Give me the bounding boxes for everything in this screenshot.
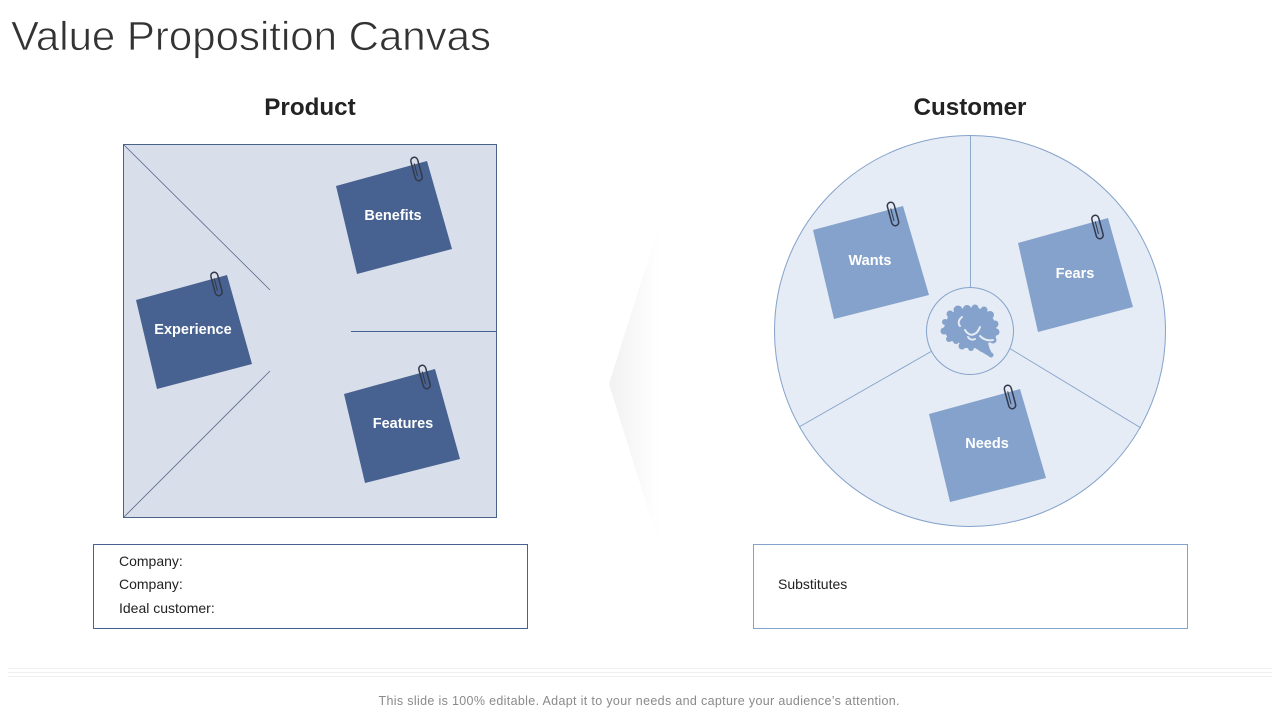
panel: substitutes box: Substitutes (778, 576, 847, 592)
icon: paperclip (418, 365, 431, 389)
panel: product details box: Ideal customer: (119, 600, 215, 616)
icon: paperclip (1004, 385, 1016, 409)
note: features: Features (373, 416, 433, 432)
panel: product details box (94, 544, 528, 628)
note: benefits (336, 157, 452, 274)
note: experience (136, 272, 252, 389)
panel: substitutes box (754, 544, 1188, 628)
panel: product details box: Company: (119, 576, 183, 592)
title: Value Proposition Canvas (11, 13, 491, 59)
heading: product: Product (264, 94, 356, 121)
note: needs: Needs (965, 436, 1009, 452)
heading: customer: Customer (914, 94, 1027, 121)
hub circle (926, 288, 1014, 374)
footer note: This slide is 100% editable. Adapt it to your needs and capture your audience’s attention. (378, 694, 900, 708)
panel: customer circle (774, 136, 1166, 526)
note: wants: Wants (849, 253, 891, 269)
icon: paperclip (1091, 215, 1104, 239)
icon: paperclip (210, 272, 223, 296)
note: fears: Fears (1056, 266, 1094, 282)
note: benefits: Benefits (364, 208, 422, 224)
panel: product square (124, 144, 496, 518)
note: features (344, 365, 460, 483)
icon: paperclip (410, 157, 423, 181)
note: needs (929, 385, 1046, 502)
icon: brain (940, 304, 1000, 358)
note: experience: Experience (154, 322, 232, 338)
icon: paperclip (887, 202, 899, 226)
arrow: faded chevron (609, 222, 660, 548)
note: fears (1018, 215, 1133, 332)
note: wants (813, 202, 929, 319)
panel: product details box: Company: (119, 553, 183, 569)
